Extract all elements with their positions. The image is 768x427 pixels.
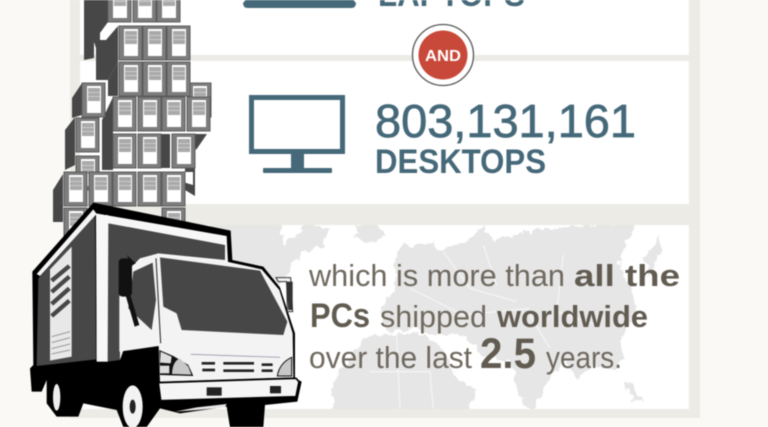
comparison text: all the <box>574 258 680 293</box>
comparison text <box>308 258 680 378</box>
rear wheel <box>53 384 60 411</box>
comparison text: which is more than <box>308 258 565 293</box>
front wheel <box>123 385 143 427</box>
box top edge <box>37 209 97 276</box>
comparison text: worldwide <box>496 299 648 334</box>
comparison text: 2.5 <box>480 330 536 378</box>
cab windshield <box>160 257 287 335</box>
box front white <box>96 213 228 360</box>
cab side window <box>128 263 156 330</box>
tower of desktop computers <box>53 0 211 242</box>
truck cab <box>119 255 293 382</box>
world map <box>210 222 662 415</box>
delivery truck <box>30 203 302 427</box>
truck silhouette <box>30 203 302 427</box>
panel: world comparison <box>80 222 689 415</box>
right headlight <box>277 357 292 376</box>
grille <box>191 354 280 371</box>
panel: laptops <box>80 0 689 55</box>
panel: desktops <box>80 61 689 204</box>
comparison text: over the last <box>309 340 472 375</box>
box side panel <box>37 216 96 366</box>
right mirror <box>276 278 293 312</box>
badge: and <box>412 24 474 86</box>
box side louvres <box>50 247 72 361</box>
icon: laptop base <box>243 0 356 8</box>
comparison text: years. <box>546 340 622 375</box>
comparison text: PCs <box>310 297 370 335</box>
corner post <box>97 215 108 362</box>
left mirror <box>119 255 139 327</box>
desktop count: 803,131,161 <box>375 95 636 147</box>
door pillar <box>156 258 161 343</box>
box front dark panel <box>108 223 225 362</box>
bumper <box>158 378 299 401</box>
badge: and: AND <box>425 48 461 65</box>
comparison text: shipped <box>380 299 487 334</box>
icon: desktop monitor <box>249 95 345 173</box>
left headlight <box>159 350 193 376</box>
map borders <box>370 245 597 408</box>
label: desktops: DESKTOPS <box>375 143 546 181</box>
axle highlight <box>175 404 227 412</box>
